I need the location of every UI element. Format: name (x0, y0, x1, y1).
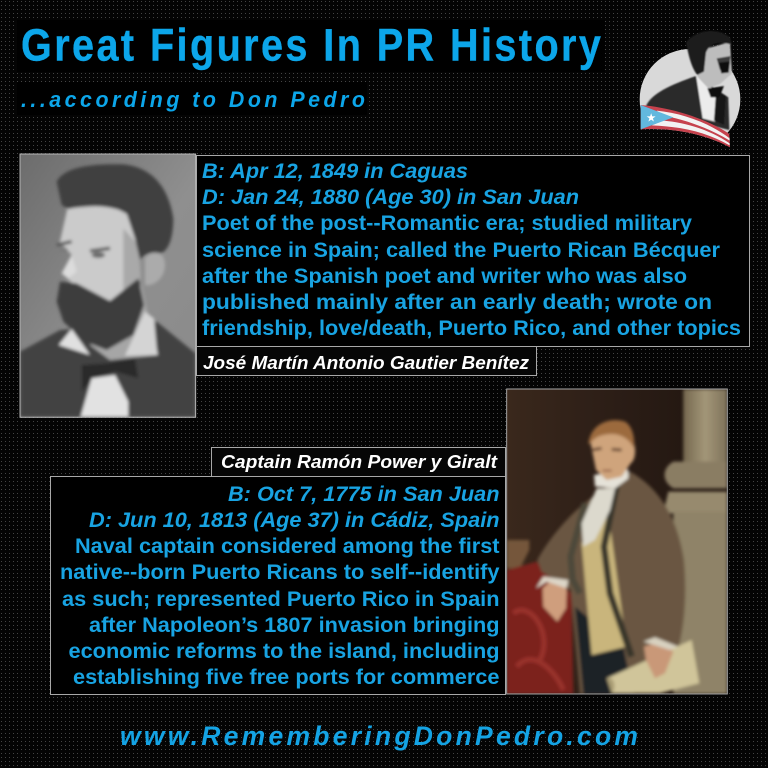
panel: Ramón Power biography (50, 476, 506, 694)
icon: Don Pedro badge with flag (640, 31, 740, 150)
text: birth and death: B: Apr 12, 1849 in Caguas (202, 158, 468, 183)
portrait: Gautier Benítez (20, 154, 196, 417)
name label: José Martín Antonio Gautier Benítez: José Martín Antonio Gautier Benítez (203, 352, 530, 373)
text: description: science in Spain; called the Puerto Rican Bécquer (202, 237, 721, 262)
text: birth and death: D: Jun 10, 1813 (Age 37) in Cádiz, Spain (89, 507, 500, 532)
text: description: published mainly after an early death; wrote on (202, 289, 712, 314)
text: description: economic reforms to the island, including (68, 638, 499, 663)
footer website: www.RememberingDonPedro.com (120, 721, 638, 751)
text: description: Naval captain considered among the first (75, 533, 499, 558)
text: description: native--born Puerto Ricans to self--identify (60, 559, 500, 584)
text: description: after the Spanish poet and writer who was also (202, 263, 687, 288)
text: description (202, 210, 741, 340)
subtitle: ...according to Don Pedro (21, 86, 365, 112)
name label: Captain Ramón Power y Giralt: Captain Ramón Power y Giralt (221, 451, 498, 472)
name label: Captain Ramón Power y Giralt (212, 448, 506, 476)
text: birth and death: B: Oct 7, 1775 in San Juan (228, 481, 500, 506)
text: description: as such; represented Puerto Rico in Spain (62, 586, 500, 611)
text: description: Poet of the post--Romantic era; studied military (202, 210, 692, 235)
name label: José Martín Antonio Gautier Benítez (196, 346, 536, 376)
panel: Gautier Benítez biography (196, 156, 750, 346)
text: description: establishing five free ports for commerce (73, 664, 500, 689)
icon: man silhouette (646, 31, 732, 130)
text: birth and death: D: Jan 24, 1880 (Age 30) in San Juan (202, 184, 579, 209)
text: description: after Napoleon’s 1807 invasion bringing (89, 612, 499, 637)
text: description: friendship, love/death, Puerto Rico, and other topics (202, 315, 741, 340)
text: description (60, 533, 500, 689)
icon: Puerto Rico flag: ★ (646, 113, 656, 125)
title: Great Figures In PR History (21, 20, 601, 70)
text: birth and death (89, 481, 500, 532)
text: birth and death (202, 158, 579, 209)
portrait: Ramón Power (507, 389, 727, 694)
